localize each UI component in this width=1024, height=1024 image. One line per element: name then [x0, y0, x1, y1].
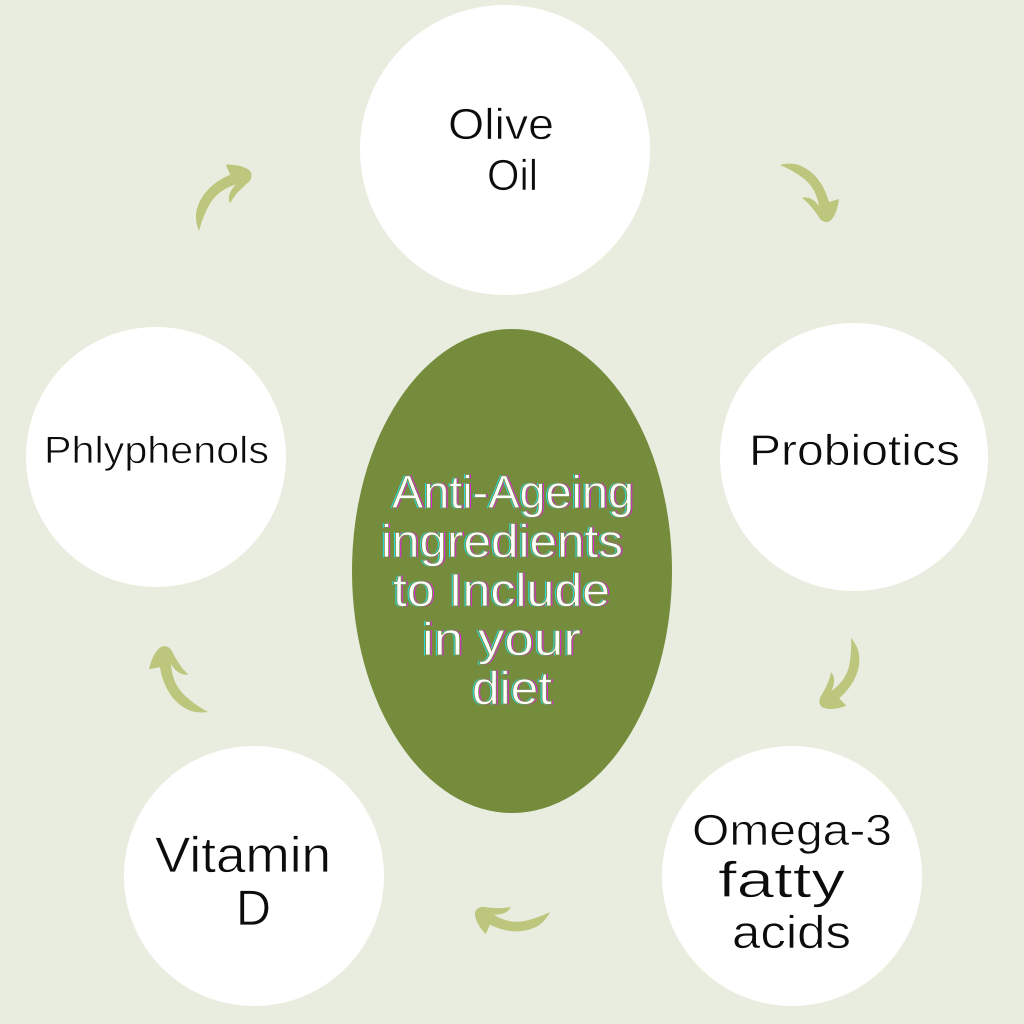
center title: to Include: [393, 564, 610, 616]
center title: [381, 466, 634, 714]
circle: Phlyphenols: [26, 327, 286, 587]
circle: Probiotics: [720, 323, 988, 591]
arrow: Phlyphenols to Olive Oil: [189, 161, 258, 231]
circle: Olive Oil: Oil: [487, 151, 538, 200]
circle: Omega-3 fatty acids: Omega-3: [692, 806, 892, 855]
arrow: Probiotics to Omega-3: [800, 637, 878, 716]
circle: Olive Oil: [360, 5, 650, 295]
circle: Olive Oil: Olive: [448, 100, 554, 149]
circle: Probiotics: Probiotics: [749, 426, 960, 475]
circle: Vitamin D: Vitamin: [155, 827, 331, 883]
arrow: Olive Oil to Probiotics: [780, 164, 839, 222]
center ellipse: [352, 329, 672, 813]
arrow: Omega-3 to Vitamin D: [468, 875, 551, 957]
center title: Anti-Ageing: [392, 466, 634, 518]
arrow: Vitamin D to Phlyphenols: [145, 645, 214, 713]
center title: diet: [472, 662, 552, 714]
circle: Vitamin D: D: [236, 880, 271, 936]
circle: Vitamin D: [124, 746, 384, 1006]
circle: Omega-3 fatty acids: [662, 746, 922, 1006]
circle: Omega-3 fatty acids: acids: [732, 906, 851, 958]
center title: ingredients: [381, 515, 623, 567]
center title: in your: [422, 613, 581, 665]
circle: Phlyphenols: Phlyphenols: [44, 430, 269, 472]
circle: Omega-3 fatty acids: fatty: [718, 852, 845, 908]
